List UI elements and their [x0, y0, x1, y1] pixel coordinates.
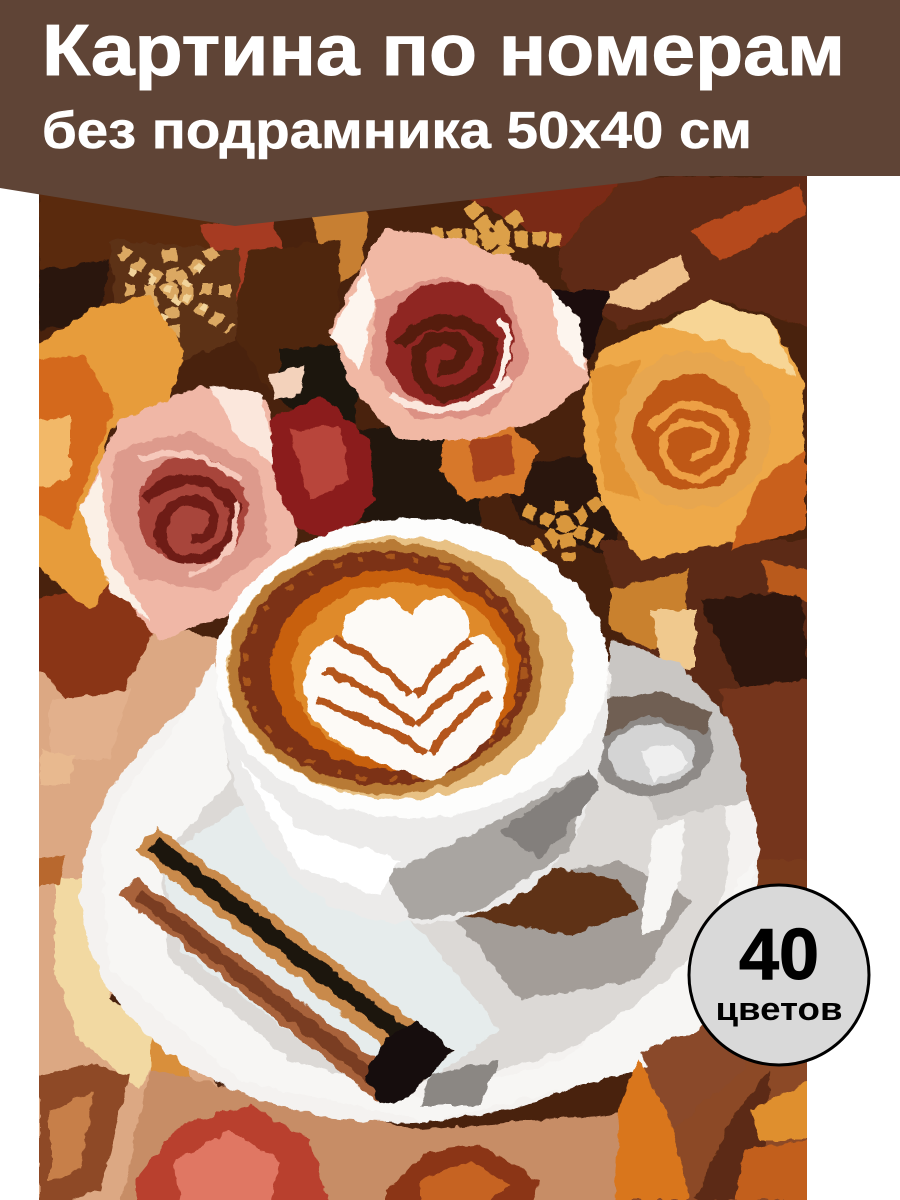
- table surface: [30, 580, 810, 1200]
- badge: 40 colours: 40: [739, 915, 819, 995]
- subtitle: без подрамника 50х40 см: [42, 102, 752, 160]
- leaf, bottom left: [39, 1065, 130, 1200]
- right side dark leaves: [522, 496, 807, 862]
- saucer: [78, 639, 760, 1124]
- dried flowers: [430, 205, 560, 500]
- pink rose, top: [330, 228, 590, 440]
- painting: roses and latte: [30, 170, 820, 1200]
- badge: 40 colours: цветов: [716, 991, 842, 1027]
- autumn leaves, bottom right: [615, 1015, 810, 1200]
- painting background: [30, 170, 820, 1200]
- pink rose, left: [80, 385, 300, 640]
- cinnamon sticks: [120, 827, 453, 1105]
- title banner: [0, 0, 900, 226]
- latte art heart: [304, 597, 506, 782]
- latte coffee surface: [227, 537, 573, 799]
- cup handle: [588, 690, 712, 795]
- red flower, bottom: [135, 1105, 330, 1200]
- cup body: [216, 518, 608, 923]
- leaf, bottom center: [385, 1145, 540, 1200]
- dark red flower: [270, 365, 375, 540]
- badge: 40 colours: [689, 885, 869, 1065]
- orange rose, left edge: [30, 295, 185, 610]
- orange rose, right: [583, 300, 805, 560]
- title: Картина по номерам: [42, 11, 845, 91]
